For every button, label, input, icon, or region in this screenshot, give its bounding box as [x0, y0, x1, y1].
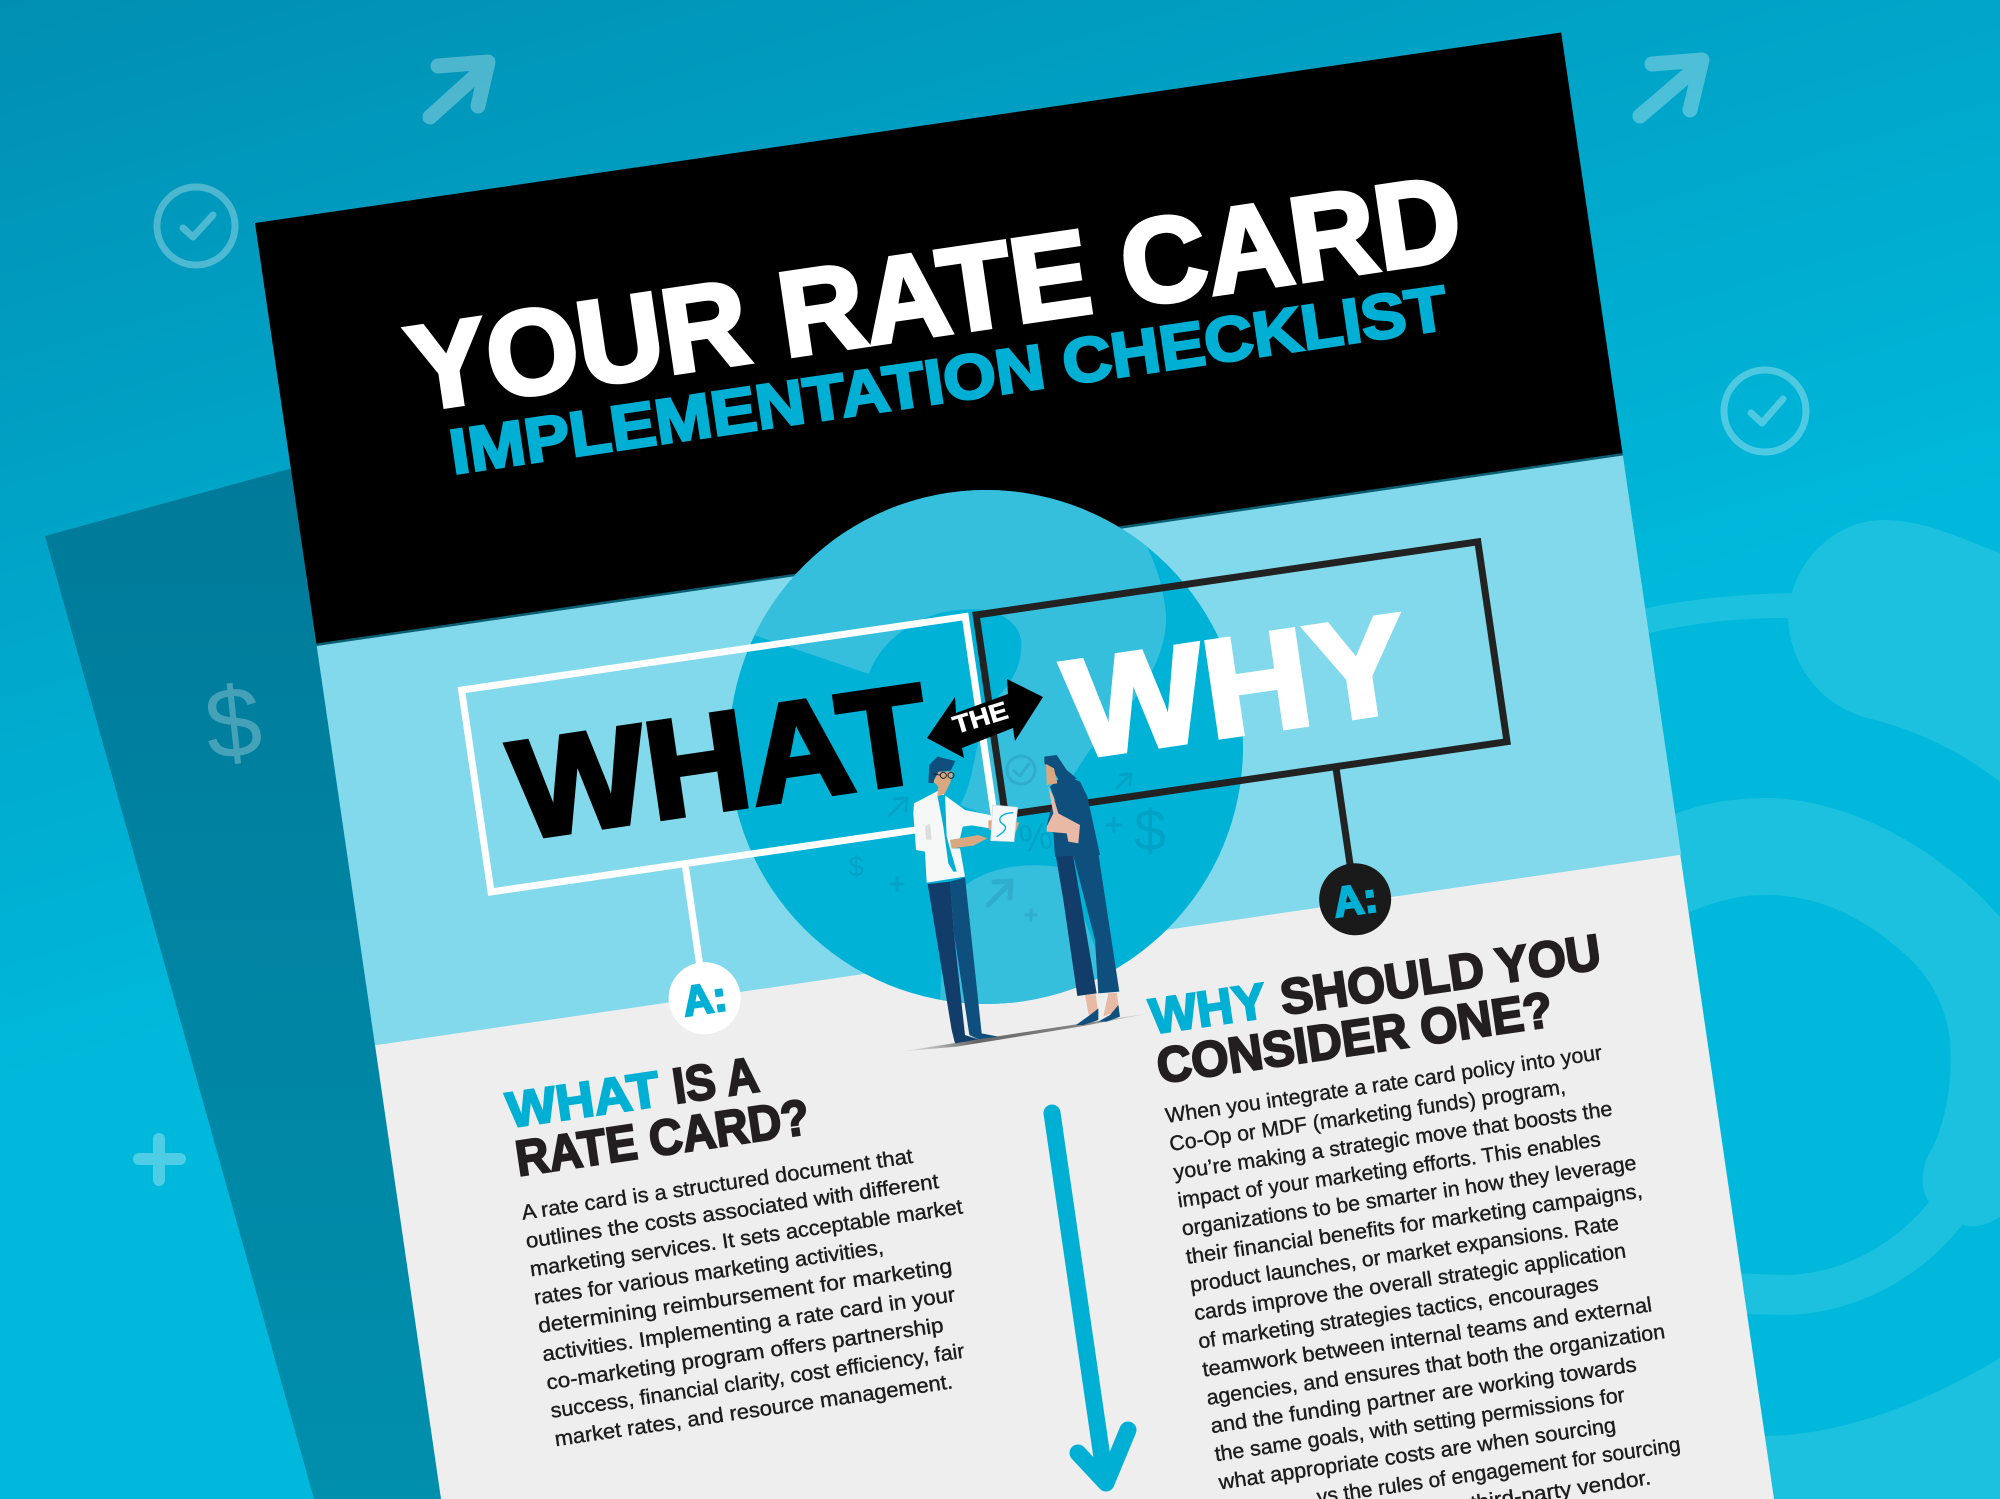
- icon: arrow top left: [430, 62, 488, 117]
- background logo shape: [1620, 520, 2000, 1499]
- text: why should you consider one: you’re making a strategic move that boosts the: [1172, 1097, 1614, 1184]
- heading: why should you consider one: [1146, 924, 1612, 1094]
- text: what is a rate card: outlines the costs associated with different: [524, 1170, 940, 1253]
- text: why should you consider one: of marketing strategies tactics, encourages: [1197, 1272, 1600, 1353]
- icon: arrow top right: [1640, 60, 1702, 116]
- why word: WHY: [1056, 585, 1418, 788]
- text: what is a rate card: A rate card is a structured document that: [520, 1145, 914, 1225]
- back sheet: [45, 466, 700, 1499]
- text: what is a rate card: success, financial clarity, cost efficiency, fair: [549, 1340, 966, 1423]
- text: why should you consider one: their financial benefits for marketing campaigns,: [1184, 1180, 1644, 1269]
- why box: [976, 542, 1524, 930]
- text: what is a rate card: co-marketing program offers partnership: [545, 1314, 945, 1395]
- text: why should you consider one: Co-Op or MDF (marketing funds) program,: [1168, 1075, 1567, 1156]
- text: why should you consider one: organizations to be smarter in how they leverage: [1180, 1152, 1638, 1241]
- what box: [462, 617, 1011, 1005]
- man: [913, 757, 1019, 1043]
- what answer badge: [664, 957, 745, 1039]
- text: what is a rate card: activities. Implementing a rate card in your: [541, 1283, 957, 1366]
- text: why should you consider one: When you integrate a rate card policy into your: [1164, 1041, 1604, 1128]
- icon: check circle left: [157, 187, 235, 265]
- text: why should you consider one: teamwork between internal teams and external: [1201, 1293, 1653, 1382]
- woman: [1044, 755, 1120, 1025]
- title: YOUR RATE CARD: [399, 151, 1469, 437]
- heading: what is a rate card: WHAT: [503, 1061, 663, 1139]
- circle backdrop: $: [848, 851, 864, 882]
- circle backdrop: %: [1016, 815, 1056, 861]
- what connector: [685, 864, 701, 976]
- heading: what is a rate card: IS A: [669, 1047, 762, 1114]
- icon: plus: [139, 1139, 180, 1180]
- panel: grey body: [375, 853, 1774, 1499]
- heading: why should you consider one: CONSIDER ONE?: [1153, 981, 1556, 1094]
- what answer badge: A:: [680, 972, 730, 1025]
- why connector: [1336, 767, 1353, 881]
- text: what is a rate card: [520, 1139, 989, 1451]
- text: why should you consider one: impact of your marketing efforts. This enables: [1176, 1128, 1602, 1212]
- text: why should you consider one: cards improve the overall strategic application: [1193, 1240, 1627, 1325]
- text: what is a rate card: marketing services. It sets acceptable market: [528, 1195, 964, 1281]
- ground shadow: [900, 1013, 1153, 1052]
- circle backdrop: [732, 490, 1243, 1004]
- why answer badge: [1314, 858, 1396, 940]
- heading: what is a rate card: [503, 1040, 813, 1187]
- text: why should you consider one: the same goals, with setting permissions for: [1213, 1384, 1626, 1466]
- text: why should you consider one: and the funding partner are working towards: [1209, 1353, 1638, 1438]
- what word: WHAT: [502, 655, 938, 869]
- text: why should you consider one: [1163, 1038, 1687, 1499]
- arrow: long down arrow: [1052, 1113, 1128, 1483]
- arrow: the double arrow: [927, 679, 1043, 758]
- page content: [389, 145, 1687, 1499]
- arrow: the double arrow: THE: [950, 697, 1011, 740]
- text: what is a rate card: determining reimbursement for marketing: [537, 1255, 954, 1338]
- text: why should you consider one: what appropriate costs are when sourcing: [1216, 1414, 1617, 1495]
- text: why should you consider one: product launches, or market expansions. Rate: [1189, 1212, 1620, 1297]
- icon: dollar: $: [200, 664, 267, 782]
- subtitle: IMPLEMENTATION CHECKLIST: [445, 273, 1452, 488]
- heading: why should you consider one: WHY: [1146, 973, 1270, 1045]
- panel: header black band: [255, 32, 1623, 646]
- heading: what is a rate card: RATE CARD?: [512, 1089, 813, 1187]
- checklist page: [255, 32, 1681, 1045]
- text: what is a rate card: market rates, and resource management.: [553, 1370, 954, 1451]
- panel: light blue band: [317, 455, 1681, 1045]
- text: what is a rate card: rates for various marketing activities,: [532, 1236, 885, 1310]
- icon: check circle right: [1724, 370, 1806, 452]
- people illustration: [900, 755, 1153, 1052]
- heading: why should you consider one: SHOULD YOU: [1277, 924, 1604, 1026]
- text: why should you consider one: agencies, and ensures that both the organization: [1205, 1320, 1666, 1410]
- circle backdrop: $: [1134, 798, 1166, 863]
- why answer badge: A:: [1330, 873, 1380, 926]
